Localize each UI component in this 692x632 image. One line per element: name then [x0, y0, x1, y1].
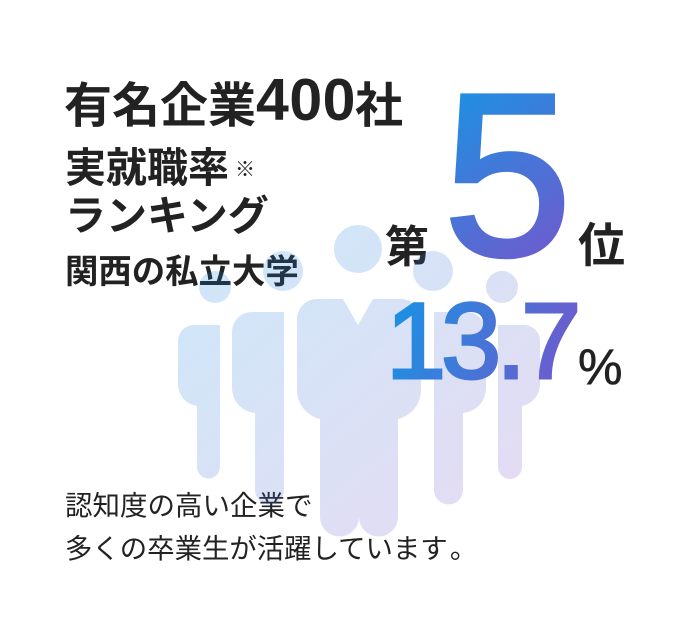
description — [65, 483, 477, 566]
description: 多くの卒業生が活躍しています。 — [65, 526, 477, 566]
description: 認知度の高い企業で — [65, 483, 312, 523]
heading: title: 400 — [256, 67, 356, 133]
percentage number: 13.7 — [386, 280, 576, 401]
people illustration — [178, 225, 540, 536]
heading: title: 社 — [355, 66, 403, 136]
heading: title — [64, 66, 403, 136]
rank suffix: 位 — [578, 207, 625, 276]
big rank number: 5 — [443, 46, 572, 305]
heading: ranking name — [65, 134, 269, 242]
rank prefix: 第 — [385, 211, 429, 275]
percent sign: % — [578, 339, 622, 395]
heading: title: 有名企業 — [64, 66, 256, 136]
subheading: region: 関西の私立大学 — [65, 244, 299, 293]
note mark: ※ — [235, 153, 255, 182]
heading: ranking name: ランキング — [65, 182, 269, 242]
heading: ranking name: 実就職率 — [65, 134, 229, 194]
